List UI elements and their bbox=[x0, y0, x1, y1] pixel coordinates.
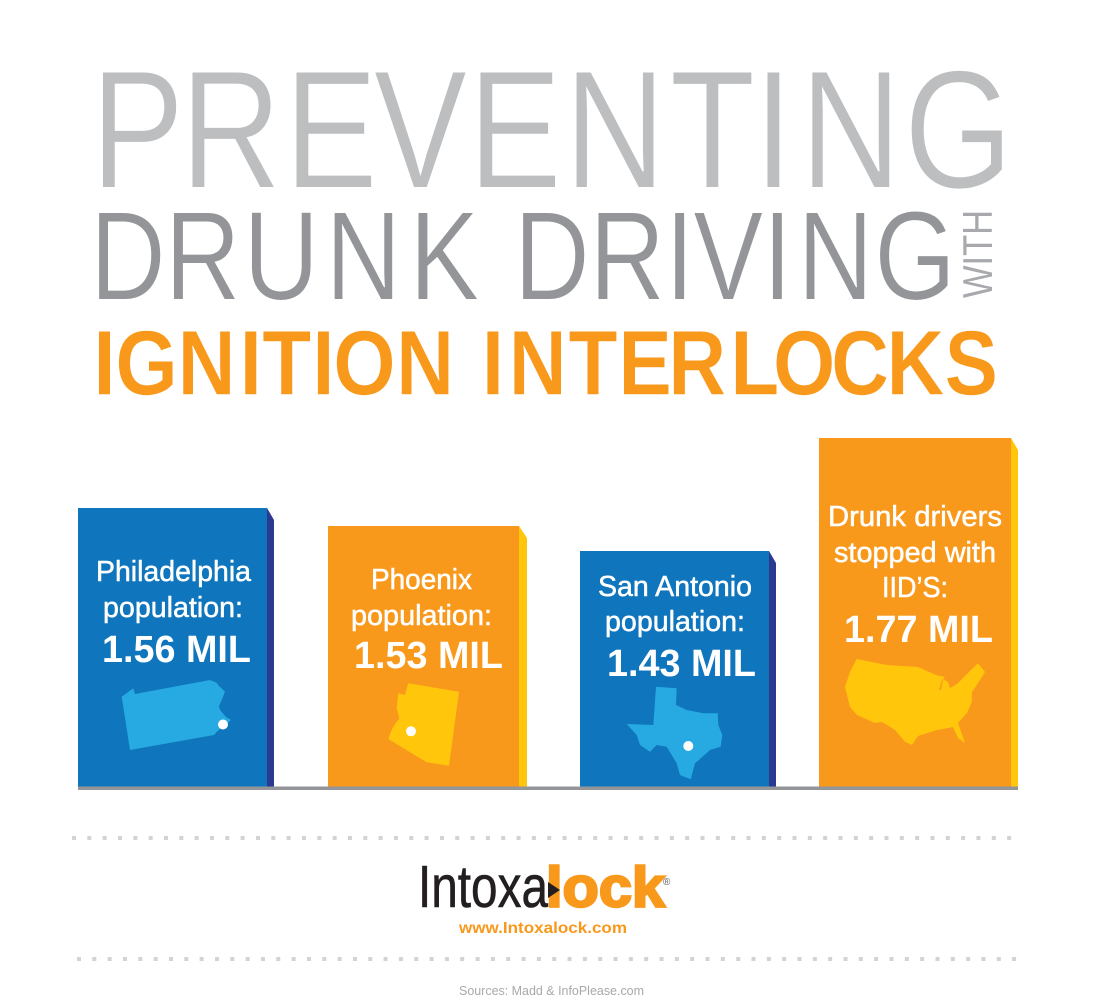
logo: Intoxalock bbox=[418, 854, 671, 920]
title bbox=[90, 35, 1013, 415]
title line: PREVENTING: PREVENTING bbox=[91, 35, 1013, 224]
divider: lower dots bbox=[77, 957, 1019, 961]
label: Philadelphia population: Philadelphia bbox=[96, 556, 252, 588]
panel: San Antonio bar bbox=[580, 551, 776, 787]
label: Philadelphia population bbox=[96, 556, 252, 671]
title line: IGNITION INTERLOCKS: IGNITION INTERLOCKS bbox=[93, 312, 998, 415]
label: Phoenix population: 1.53 MIL bbox=[354, 635, 503, 677]
panel: Phoenix bar bbox=[328, 526, 527, 787]
icon: United States map bbox=[845, 659, 985, 745]
panel: Philadelphia bar bbox=[78, 508, 274, 787]
label: drunk drivers stopped with IIDs: stopped with bbox=[834, 537, 996, 569]
divider: upper dots bbox=[72, 836, 1014, 840]
label: San Antonio population bbox=[598, 571, 756, 685]
label: Philadelphia population: population: bbox=[103, 592, 243, 624]
label: drunk drivers stopped with IIDs bbox=[828, 501, 1002, 651]
label: San Antonio population: 1.43 MIL bbox=[607, 643, 756, 685]
label: drunk drivers stopped with IIDs: 1.77 MIL bbox=[844, 609, 993, 651]
label: Phoenix population bbox=[351, 564, 503, 677]
icon: Texas map bbox=[627, 687, 722, 779]
title word: WITH: WITH bbox=[954, 210, 1001, 298]
baseline axis bbox=[78, 786, 1018, 790]
label: Phoenix population: population: bbox=[351, 600, 492, 632]
logo: Intoxalock: ® bbox=[663, 877, 671, 888]
label: San Antonio population: population: bbox=[605, 606, 745, 638]
logo: Intoxalock: lock bbox=[546, 856, 665, 920]
panel: drunk drivers stopped bar bbox=[819, 438, 1018, 787]
label: drunk drivers stopped with IIDs: IID’S: bbox=[882, 572, 948, 604]
icon: Pennsylvania map bbox=[122, 680, 231, 750]
icon: Arizona map bbox=[388, 683, 459, 766]
label: Philadelphia population: 1.56 MIL bbox=[102, 629, 251, 671]
label: San Antonio population: San Antonio bbox=[598, 571, 752, 603]
label: drunk drivers stopped with IIDs: Drunk drivers bbox=[828, 501, 1002, 533]
label: Phoenix population: Phoenix bbox=[371, 564, 472, 596]
logo: Intoxalock: Intoxa bbox=[418, 854, 548, 920]
website url: www.Intoxalock.com bbox=[458, 920, 627, 937]
title line: DRUNK DRIVING: DRUNK DRIVING bbox=[90, 185, 956, 327]
sources note: Sources: Madd & InfoPlease.com bbox=[459, 983, 644, 998]
